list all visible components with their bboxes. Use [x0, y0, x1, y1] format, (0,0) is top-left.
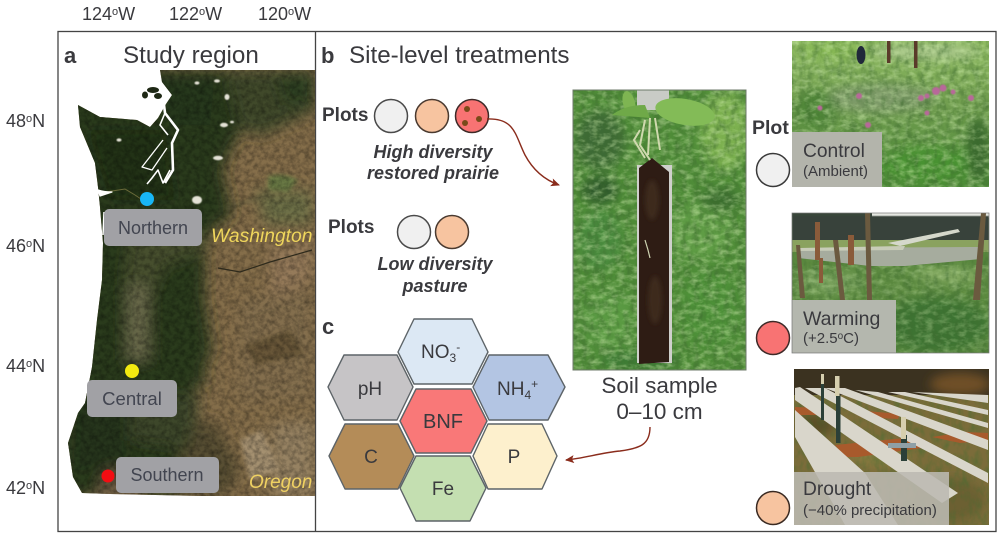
longitude axis labels: o — [112, 6, 118, 18]
site marker: southern: Southern — [130, 465, 204, 485]
high diversity caption: restored prairie — [367, 163, 499, 183]
hexagon: nitrate — [398, 319, 488, 384]
latitude axis labels: o — [26, 358, 32, 370]
satellite map — [60, 70, 316, 496]
soil sample caption: Soil sample — [601, 373, 718, 398]
longitude axis labels: W — [294, 4, 311, 24]
heading: study region: Study region — [123, 42, 259, 69]
latitude axis labels: N — [32, 356, 45, 376]
soil core tube — [637, 90, 672, 364]
low diversity caption: pasture — [401, 276, 468, 296]
hexagon: pH: pH — [358, 379, 382, 400]
photo: soil core — [573, 90, 750, 370]
seedling and leaf — [612, 90, 717, 160]
soil sample caption: 0–10 cm — [616, 399, 703, 424]
plot heading: Plot — [752, 117, 789, 139]
san juan islands — [142, 87, 162, 99]
caption: warming: Warming — [803, 308, 880, 330]
washington label: Washington — [211, 226, 312, 247]
caption: warming: (+2.5 — [803, 330, 838, 347]
latitude axis labels: o — [26, 238, 32, 250]
caption: drought: Drought — [803, 479, 872, 500]
site marker: northern — [104, 192, 202, 246]
caption: drought: (−40% precipitation) — [803, 502, 937, 519]
latitude axis labels: N — [32, 478, 45, 498]
caption: control — [792, 132, 882, 187]
site marker: central: Central — [102, 388, 162, 409]
caption: control: (Ambient) — [803, 163, 868, 180]
hexagon: ammonium: + — [531, 377, 538, 391]
snow peaks — [116, 79, 234, 204]
caption: warming: C) — [843, 330, 859, 347]
caption: drought — [794, 472, 949, 525]
arrow: soil sample to hexagons — [566, 427, 650, 460]
latitude axis labels: o — [26, 113, 32, 125]
plot circle: control — [756, 154, 790, 186]
rust boards — [795, 407, 988, 457]
site marker: southern — [102, 457, 219, 493]
hexagon diagram — [328, 319, 565, 521]
hexagon: carbon — [329, 424, 414, 489]
puget sound — [98, 97, 178, 235]
low diversity caption: Low diversity — [377, 254, 494, 274]
hexagon: nitrate: NO — [421, 342, 450, 363]
hexagon: nitrate: 3 — [450, 351, 456, 365]
latitude axis labels: 42 — [6, 478, 26, 498]
hexagon: phosphorus: P — [508, 447, 520, 468]
hexagon: iron: Fe — [432, 479, 454, 500]
hexagon: BNF: BNF — [423, 411, 463, 433]
panel b label: b — [321, 43, 334, 68]
oregon label: Oregon — [249, 472, 312, 493]
photo: control plot — [792, 41, 990, 187]
plot circle: warming — [756, 322, 790, 354]
hexagon: BNF — [400, 389, 487, 453]
longitude axis labels: 124 — [82, 4, 112, 24]
longitude axis labels: W — [118, 4, 135, 24]
latitude axis labels: 44 — [6, 356, 26, 376]
soil sample caption — [601, 373, 718, 424]
latitude axis labels: 46 — [6, 236, 26, 256]
high diversity plots — [322, 100, 488, 132]
hexagon: carbon: C — [364, 447, 378, 468]
hexagon: ammonium — [473, 355, 565, 420]
longitude axis labels: W — [205, 4, 222, 24]
low diversity plots — [328, 216, 468, 248]
high diversity caption: High diversity — [373, 142, 494, 162]
low diversity caption — [377, 254, 494, 296]
latitude axis labels: o — [26, 480, 32, 492]
photo: warming plot — [792, 213, 990, 353]
white roof strips — [795, 387, 988, 525]
longitude axis labels: o — [199, 6, 205, 18]
latitude axis labels: 48 — [6, 111, 26, 131]
caption: warming: o — [838, 331, 844, 342]
latitude axis labels: N — [32, 111, 45, 131]
latitude axis labels: N — [32, 236, 45, 256]
plot circle: drought — [756, 492, 790, 524]
photo: drought plot — [794, 369, 990, 525]
panel c label: c — [322, 314, 334, 339]
latitude axis labels — [6, 111, 45, 498]
caption: warming — [792, 300, 896, 353]
hexagon: iron — [400, 456, 486, 521]
hexagon: ammonium: 4 — [524, 388, 531, 402]
longitude axis labels — [82, 4, 311, 24]
high diversity caption — [367, 142, 499, 183]
heading: site-level treatments: Site-level treatments — [349, 42, 569, 69]
hexagon: phosphorus — [473, 424, 557, 489]
panel a label: a — [64, 43, 77, 68]
hexagon: pH — [328, 355, 413, 420]
high diversity plots: Plots — [322, 105, 368, 126]
site marker: central — [87, 364, 177, 417]
site marker: northern: Northern — [118, 218, 188, 238]
hexagon: nitrate: - — [456, 340, 460, 354]
longitude axis labels: 120 — [258, 4, 288, 24]
caption: control: Control — [803, 141, 865, 162]
longitude axis labels: o — [288, 6, 294, 18]
hexagon: ammonium: NH — [497, 379, 524, 400]
arrow: plot to soil sample — [487, 119, 559, 185]
low diversity plots: Plots — [328, 217, 374, 238]
longitude axis labels: 122 — [169, 4, 199, 24]
